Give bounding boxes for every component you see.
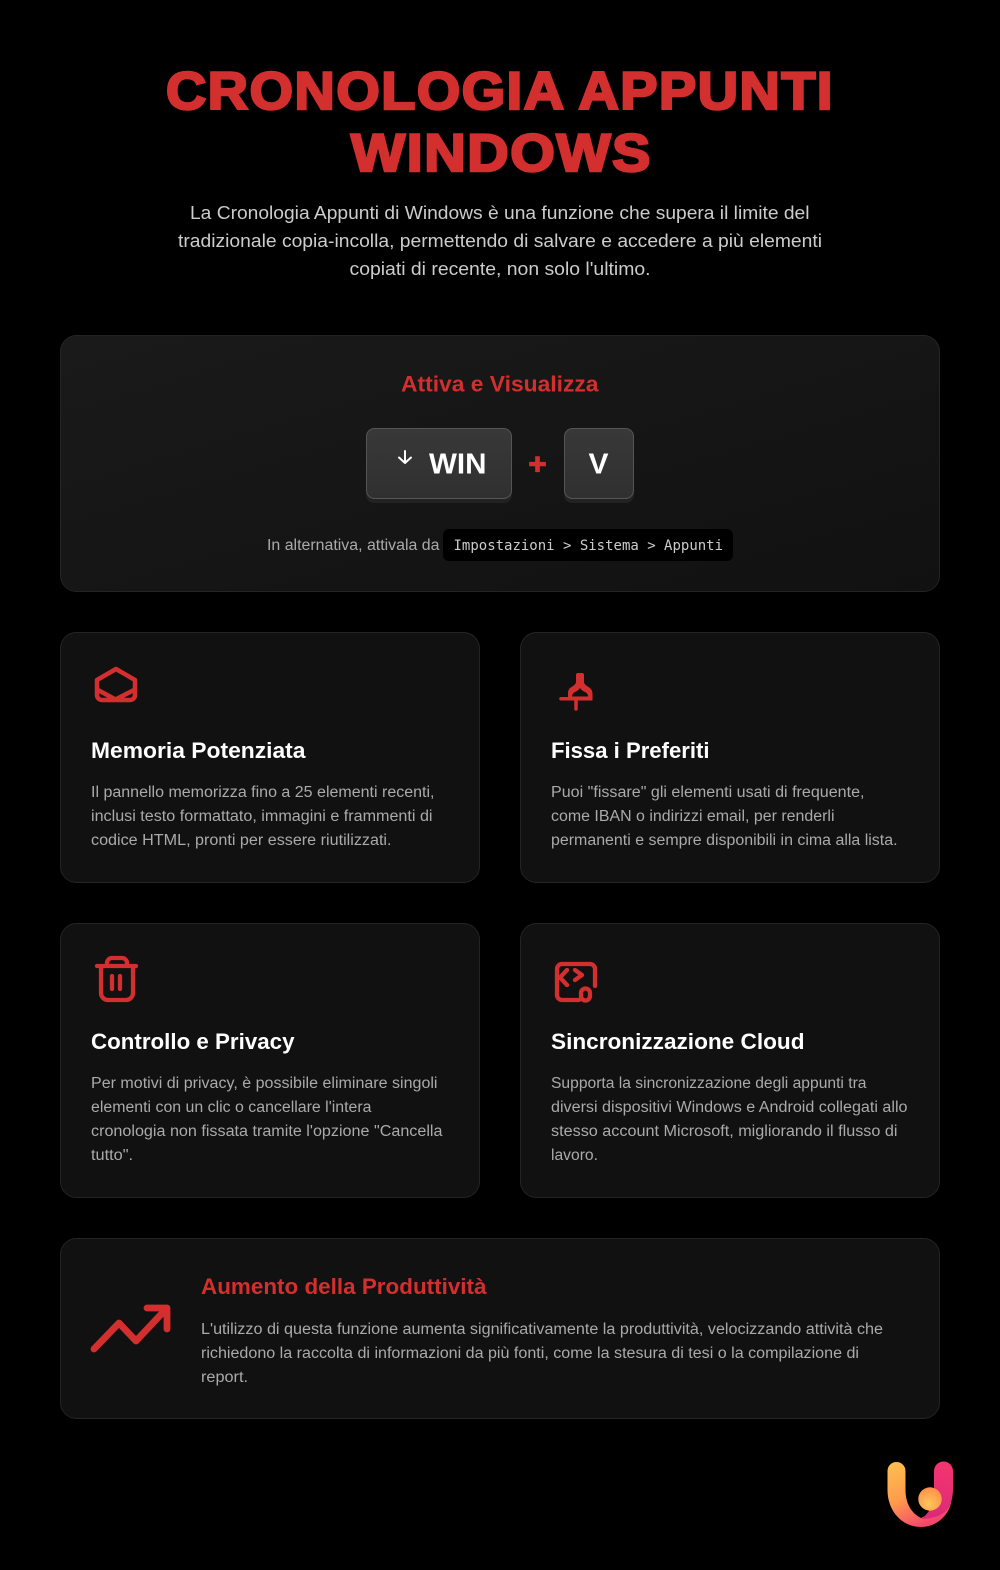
body text: diversi dispositivi Windows e Android collegati allo xyxy=(551,1099,908,1116)
heading: Aumento della Produttività xyxy=(201,1274,487,1299)
panel: memoria potenziata xyxy=(60,632,480,882)
body text: Supporta la sincronizzazione degli appunti tra xyxy=(551,1075,867,1092)
body text: cronologia non fissata tramite l'opzione "Cancella xyxy=(91,1123,443,1140)
body text: permanenti e sempre disponibili in cima alla lista. xyxy=(551,832,898,849)
key: WIN: WIN xyxy=(429,448,486,480)
body text: codice HTML, pronti per essere riutilizzati. xyxy=(91,832,392,849)
panel: aumento della produttività xyxy=(60,1238,940,1418)
body text xyxy=(201,1321,883,1386)
icon: trend arrow xyxy=(94,1308,167,1349)
heading: Controllo e Privacy xyxy=(91,1029,295,1054)
subtitle: copiati di recente, non solo l'ultimo. xyxy=(350,259,650,279)
settings path note xyxy=(267,529,733,561)
subtitle: La Cronologia Appunti di Windows è una funzione che supera il limite del xyxy=(190,203,810,223)
title: WINDOWS xyxy=(351,124,652,183)
subtitle xyxy=(178,203,822,279)
settings path note: Impostazioni > Sistema > Appunti xyxy=(454,538,723,554)
panel: controllo e privacy xyxy=(60,924,480,1198)
panel: fissa i preferiti xyxy=(520,632,940,882)
logo xyxy=(888,1462,953,1527)
body text xyxy=(91,784,434,849)
body text xyxy=(91,1075,443,1164)
body text: Puoi "fissare" gli elementi usati di frequente, xyxy=(551,784,864,801)
icon: pin xyxy=(559,673,592,709)
body text: elementi con un clic o cancellare l'intera xyxy=(91,1099,372,1116)
heading: Fissa i Preferiti xyxy=(551,738,710,763)
body text: tutto". xyxy=(91,1147,133,1164)
icon: open envelope xyxy=(97,669,135,700)
title: CRONOLOGIA APPUNTI xyxy=(166,62,834,121)
heading: Sincronizzazione Cloud xyxy=(551,1029,804,1054)
body text: report. xyxy=(201,1369,248,1386)
body text: richiedono la raccolta di informazioni da più fonti, come la stesura di tesi o la compilazione di xyxy=(201,1345,859,1362)
panel heading: Attiva e Visualizza xyxy=(401,372,599,396)
title xyxy=(166,62,834,183)
subtitle: tradizionale copia-incolla, permettendo di salvare e accedere a più elementi xyxy=(178,231,822,251)
panel: sincronizzazione cloud xyxy=(520,924,940,1198)
icon: trash can xyxy=(97,958,136,1000)
icon: code window xyxy=(557,964,595,1000)
body text: come IBAN o indirizzi email, per renderli xyxy=(551,808,834,825)
body text: Il pannello memorizza fino a 25 elementi recenti, xyxy=(91,784,434,801)
body text xyxy=(551,1075,908,1164)
heading: Memoria Potenziata xyxy=(91,738,306,763)
body text: stesso account Microsoft, migliorando il flusso di xyxy=(551,1123,898,1140)
settings path note: In alternativa, attivala da xyxy=(267,537,440,554)
body text: L'utilizzo di questa funzione aumenta significativamente la produttività, velocizzando attività che xyxy=(201,1321,883,1338)
body text: inclusi testo formattato, immagini e frammenti di xyxy=(91,808,432,825)
key: V: V xyxy=(588,448,609,480)
body text: lavoro. xyxy=(551,1147,598,1164)
plus sign: + xyxy=(528,449,546,481)
body text: Per motivi di privacy, è possibile eliminare singoli xyxy=(91,1075,438,1092)
key: WIN xyxy=(366,428,512,503)
body text xyxy=(551,784,898,849)
panel: attiva e visualizza xyxy=(60,336,940,592)
key: V xyxy=(564,428,634,503)
